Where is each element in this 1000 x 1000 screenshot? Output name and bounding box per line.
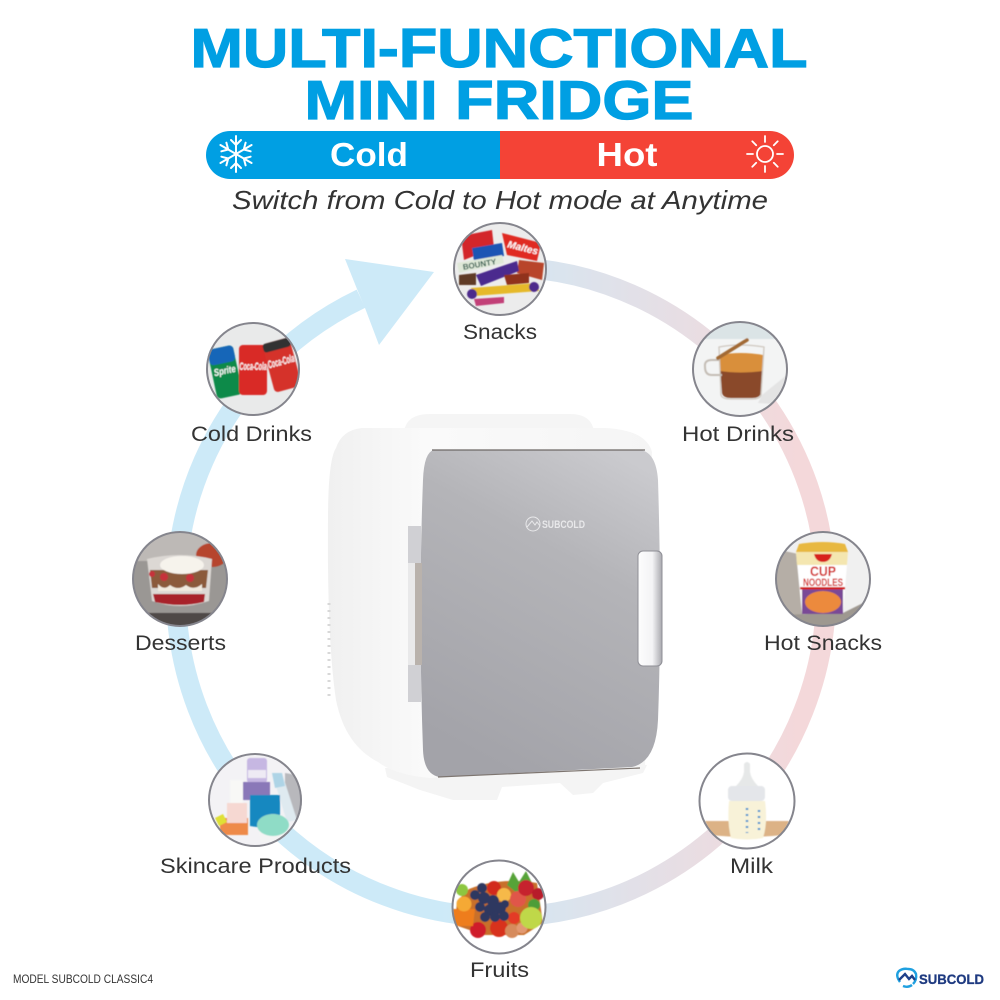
item: snacks: BOUNTY	[462, 257, 498, 272]
lower hinge	[408, 665, 421, 702]
side vents	[328, 603, 330, 700]
item: hot snacks: NOODLES	[803, 577, 843, 589]
door top edge	[432, 449, 645, 451]
circular arrow	[176, 259, 826, 917]
item: milk	[700, 754, 794, 848]
item: snacks	[454, 223, 546, 315]
hinge middle	[408, 563, 415, 665]
icon: snowflake	[218, 136, 254, 172]
label: hot drinks: Hot Drinks	[682, 422, 794, 446]
fridge feet and base	[385, 765, 647, 800]
label: skincare products: Skincare Products	[160, 854, 351, 878]
label: desserts: Desserts	[135, 631, 226, 655]
door logo: SUBCOLD	[542, 519, 585, 531]
hinge gap	[414, 563, 422, 665]
icon: sun	[747, 136, 783, 172]
brand logo	[897, 969, 984, 987]
icon: mountain logo	[897, 969, 916, 987]
item: cold drinks	[207, 323, 302, 415]
label: cold drinks: Cold Drinks	[191, 422, 312, 446]
mode switch bar	[206, 131, 794, 179]
brand name: SUBCOLD	[919, 971, 984, 987]
item: cold drinks: Sprite	[213, 364, 237, 379]
hot label: Hot	[596, 136, 658, 173]
title	[190, 17, 808, 131]
label: milk: Milk	[730, 854, 773, 878]
fridge top handle	[404, 414, 594, 432]
door logo	[526, 517, 585, 531]
hot half	[500, 131, 794, 179]
door bottom edge	[438, 768, 640, 777]
item: cold drinks: Coca-Cola	[240, 361, 266, 373]
subtitle: Switch from Cold to Hot mode at Anytime	[232, 185, 768, 215]
label: snacks: Snacks	[463, 320, 537, 344]
title: MULTI-FUNCTIONAL	[190, 17, 808, 79]
cold label: Cold	[330, 136, 408, 173]
fridge	[328, 414, 662, 800]
cold half	[206, 131, 500, 179]
title: MINI FRIDGE	[304, 69, 694, 131]
item: fruits	[452, 860, 546, 954]
fridge door	[420, 450, 660, 777]
item: hot snacks	[775, 532, 871, 627]
model note: MODEL SUBCOLD CLASSIC4	[13, 974, 154, 986]
label: fruits: Fruits	[470, 958, 529, 982]
item: hot snacks: CUP	[810, 563, 836, 579]
item: desserts	[132, 531, 228, 627]
door handle	[638, 551, 662, 666]
item: snacks: Maltes	[506, 239, 539, 258]
item: hot drinks	[692, 321, 788, 416]
item: skincare products	[209, 754, 305, 846]
label: hot snacks: Hot Snacks	[764, 631, 882, 655]
upper hinge	[408, 526, 421, 563]
fridge body	[328, 428, 652, 778]
item: cold drinks: Coca-Cola	[267, 353, 296, 371]
